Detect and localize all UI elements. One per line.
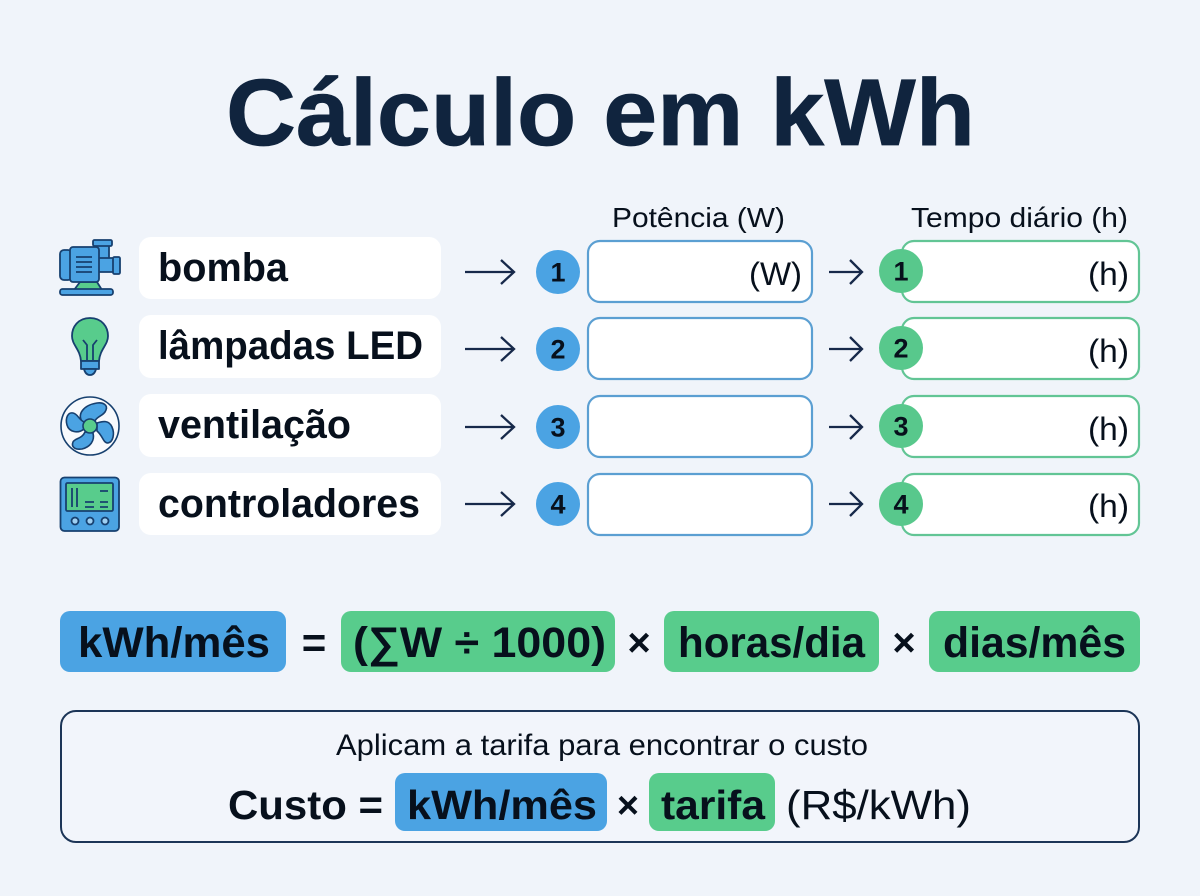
term: sum of watts: (∑W ÷ 1000) bbox=[353, 619, 606, 667]
term: kWh/mês: kWh/mês bbox=[78, 619, 270, 667]
time field 3: (h) bbox=[1088, 411, 1129, 447]
power field 4 bbox=[588, 474, 812, 535]
time field 3 bbox=[902, 396, 1139, 457]
multiply sign: × bbox=[892, 621, 916, 665]
label: bomba: bomba bbox=[158, 246, 289, 290]
time field 1 bbox=[902, 241, 1139, 302]
label: ventilação bbox=[139, 394, 441, 457]
column heading: Potência: Potência (W) bbox=[612, 202, 785, 233]
time field 2: (h) bbox=[1088, 333, 1129, 369]
number badge 3 bbox=[536, 405, 580, 449]
green badge 1 bbox=[879, 249, 923, 293]
green badge 1: 1 bbox=[893, 256, 909, 286]
number badge 4: 4 bbox=[550, 490, 566, 520]
arrow bbox=[829, 260, 862, 284]
green badge 4 bbox=[879, 482, 923, 526]
arrow bbox=[465, 260, 514, 284]
arrow bbox=[465, 415, 514, 439]
time field 4: (h) bbox=[1088, 488, 1129, 524]
term: tarifa bbox=[649, 773, 775, 831]
label: controladores bbox=[139, 473, 441, 535]
row 1: bomba bbox=[139, 237, 1139, 302]
equals sign: = bbox=[302, 619, 326, 666]
panel: cost bbox=[61, 711, 1139, 842]
time field 4 bbox=[902, 474, 1139, 535]
green badge 3 bbox=[879, 404, 923, 448]
icon: LED bulb bbox=[72, 318, 108, 375]
term: kWh/mês bbox=[60, 611, 286, 672]
column heading: Tempo diário: Tempo diário (h) bbox=[911, 202, 1128, 233]
power field 1: (W) bbox=[749, 256, 802, 292]
label: lâmpadas LED bbox=[139, 315, 441, 378]
number badge 2 bbox=[536, 327, 580, 371]
arrow bbox=[829, 415, 862, 439]
icon: fan bbox=[61, 397, 119, 455]
label: controladores: controladores bbox=[158, 482, 420, 526]
term: dias/mês bbox=[929, 611, 1140, 672]
term: tarifa: tarifa bbox=[661, 782, 766, 828]
time field 1: (h) bbox=[1088, 256, 1129, 292]
term: horas/dia: horas/dia bbox=[678, 619, 866, 667]
power field 2 bbox=[588, 318, 812, 379]
row 4: controladores bbox=[139, 473, 1139, 535]
tariff unit: (R$/kWh) bbox=[786, 782, 971, 828]
term: kWh/mês: kWh/mês bbox=[407, 782, 597, 828]
term: horas/dia bbox=[664, 611, 879, 672]
power field 3 bbox=[588, 396, 812, 457]
arrow bbox=[829, 337, 862, 361]
multiply sign: × bbox=[617, 785, 639, 827]
label: ventilação: ventilação bbox=[158, 403, 351, 447]
green badge 2 bbox=[879, 326, 923, 370]
number badge 1 bbox=[536, 250, 580, 294]
term: kWh/mês bbox=[395, 773, 607, 831]
label: lâmpadas LED: lâmpadas LED bbox=[158, 324, 423, 368]
arrow bbox=[465, 337, 514, 361]
row 2: lâmpadas LED bbox=[139, 315, 1139, 379]
number badge 2: 2 bbox=[550, 334, 566, 364]
arrow bbox=[465, 492, 514, 516]
label: bomba bbox=[139, 237, 441, 299]
number badge 3: 3 bbox=[550, 412, 566, 442]
green badge 3: 3 bbox=[893, 412, 909, 442]
number badge 4 bbox=[536, 482, 580, 526]
cost caption: Aplicam a tarifa para encontrar o custo bbox=[336, 729, 868, 762]
title: Cálculo em kWh bbox=[226, 60, 975, 166]
row 3: ventilação bbox=[139, 394, 1139, 457]
cost label: Custo = bbox=[228, 782, 383, 828]
multiply sign: × bbox=[627, 621, 651, 665]
green badge 2: 2 bbox=[893, 334, 909, 364]
term: sum of watts bbox=[341, 611, 615, 672]
formula: kWh per month bbox=[60, 611, 1140, 672]
panel outline bbox=[61, 711, 1139, 842]
icon: pump bbox=[60, 240, 120, 295]
term: dias/mês: dias/mês bbox=[943, 619, 1126, 667]
green badge 4: 4 bbox=[893, 490, 909, 520]
icon: controller bbox=[60, 478, 119, 531]
arrow bbox=[829, 492, 862, 516]
number badge 1: 1 bbox=[550, 258, 566, 288]
time field 2 bbox=[902, 318, 1139, 379]
power field 1 bbox=[588, 241, 812, 302]
